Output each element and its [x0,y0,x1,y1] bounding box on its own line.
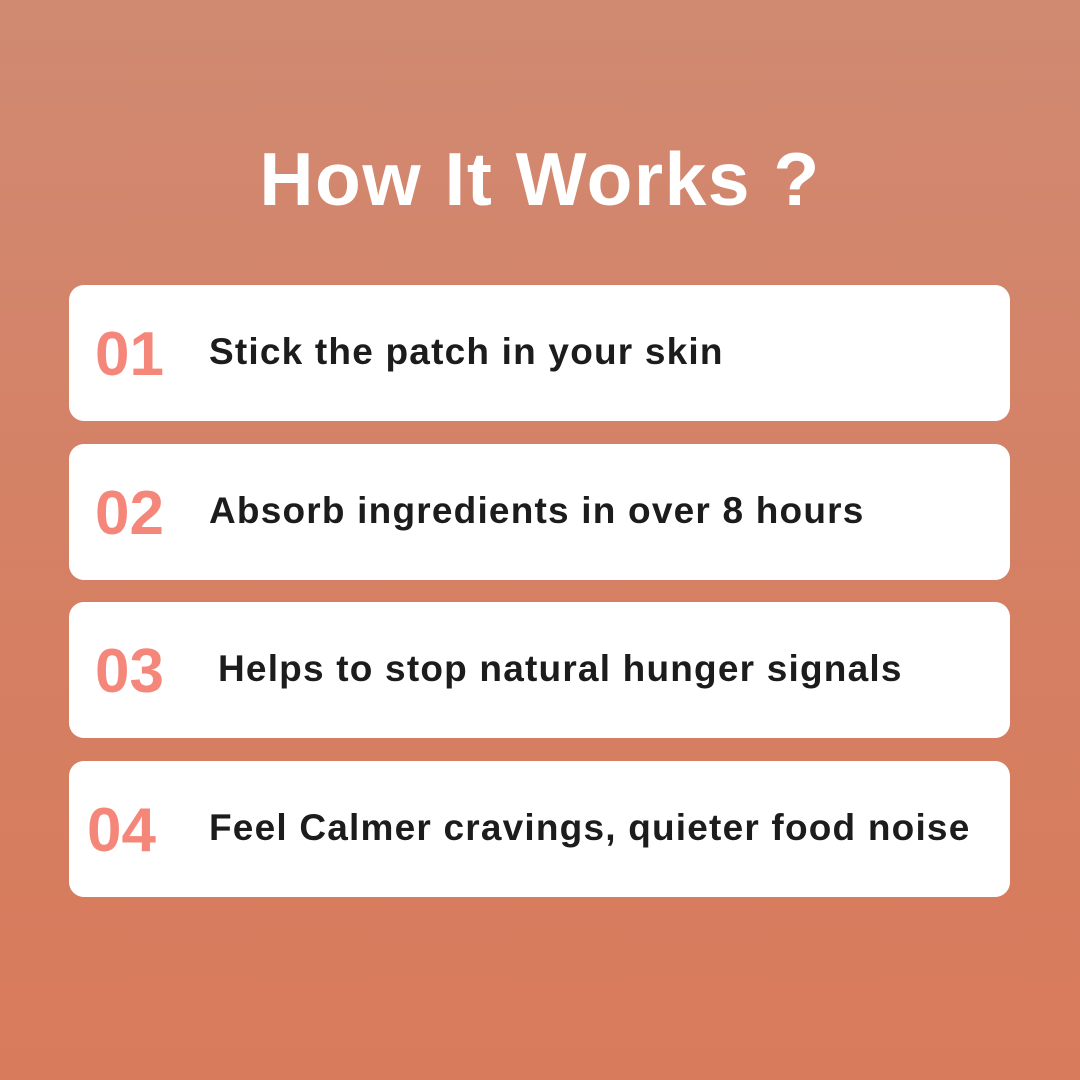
step text 03: Helps to stop natural hunger signals [218,648,903,689]
card: step 04 [69,761,1010,897]
card: step 02 [69,444,1010,580]
number 01: 01 [95,320,164,389]
step text 01: Stick the patch in your skin [209,331,724,372]
title: How It Works ? [259,137,821,221]
number 03: 03 [95,637,164,706]
card: step 01 [69,285,1010,421]
card: step 03 [69,602,1010,738]
number 04: 04 [87,796,156,865]
step text 04: Feel Calmer cravings, quieter food noise [209,807,970,848]
step text 02: Absorb ingredients in over 8 hours [209,490,865,531]
number 02: 02 [95,479,164,548]
